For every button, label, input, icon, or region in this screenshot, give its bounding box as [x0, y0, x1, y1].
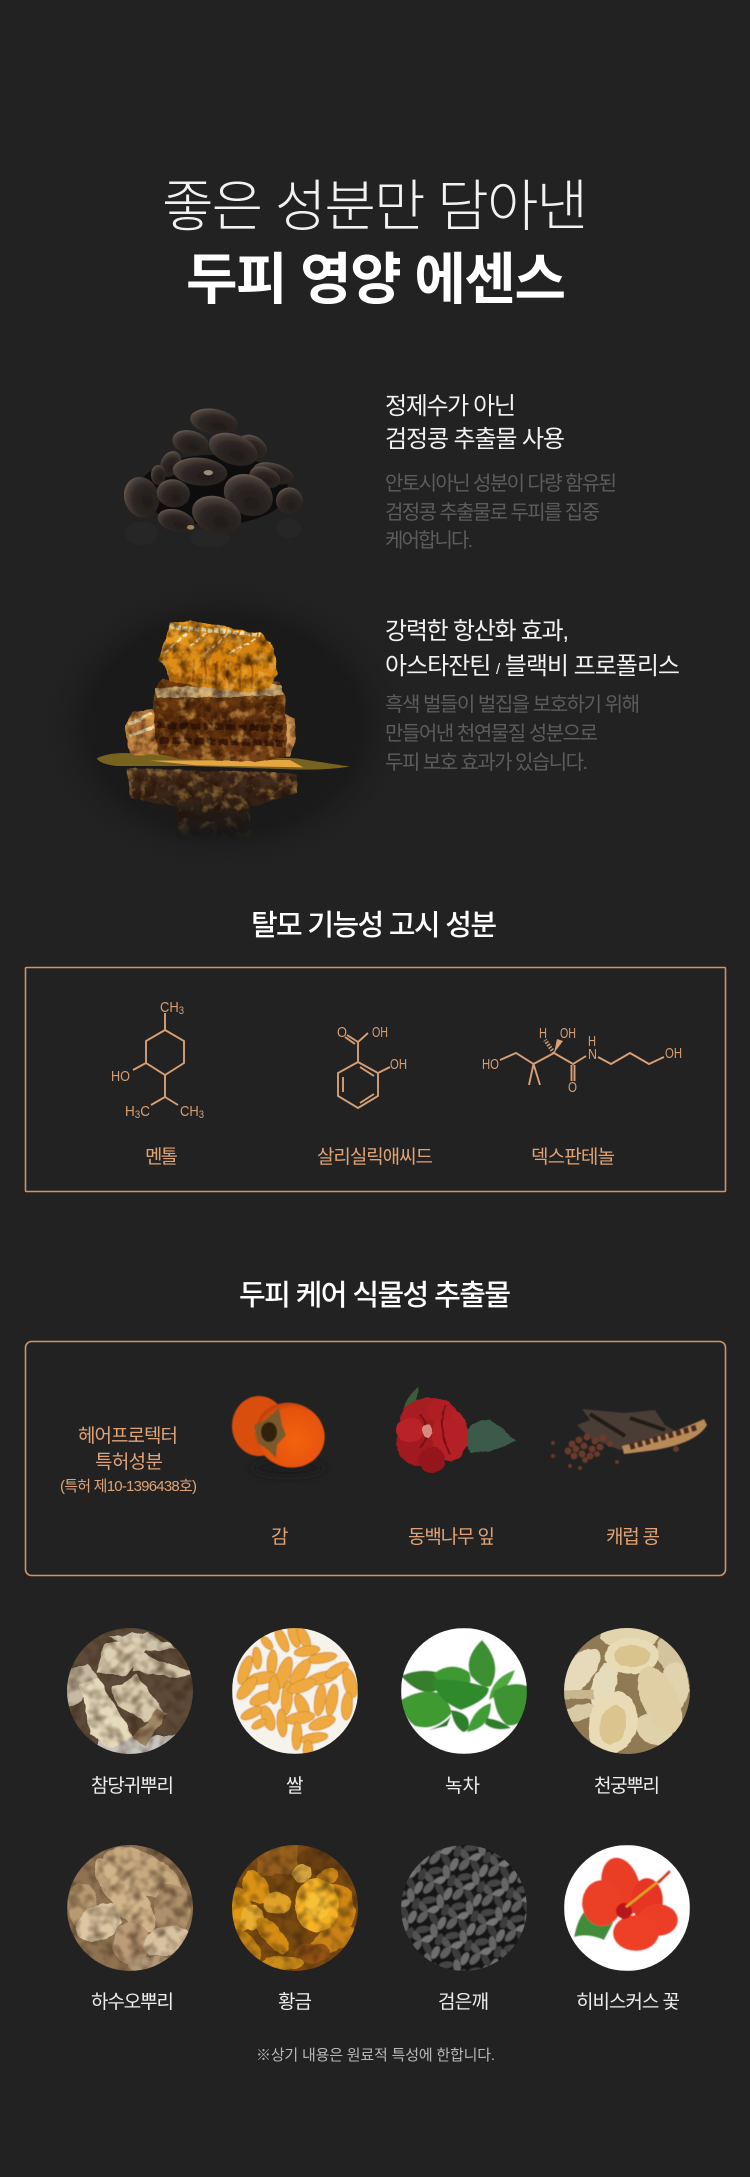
label: salicylic acid: 살리실릭애씨드 [317, 1146, 433, 1168]
molecule: menthol [111, 999, 204, 1168]
text block: black bean [385, 393, 617, 552]
text: patent: 헤어프로텍터 [78, 1425, 178, 1447]
ingredient: angelica root: 참당귀뿌리 [91, 1775, 174, 1797]
molecule: dexpanthenol: OH [665, 1045, 682, 1062]
ingredient: cnidium root: 천궁뿌리 [594, 1775, 660, 1797]
image: carob [551, 1409, 707, 1470]
labels: extracts: 감 [271, 1526, 288, 1548]
labels: extracts [271, 1526, 660, 1548]
molecule: menthol: H [125, 1103, 136, 1120]
molecule: menthol: HO [111, 1068, 130, 1085]
text: patent: (특허 제10-1396438호) [60, 1478, 197, 1495]
text block: black bean: 검정콩 추출물로 두피를 집중 [385, 501, 600, 524]
honeycomb combs [125, 621, 297, 762]
text block: honeycomb: 흑색 벌들이 벌집을 보호하기 위해 [385, 693, 640, 716]
ingredient: cnidium root [564, 1628, 690, 1794]
honey puddle [97, 753, 350, 770]
image: persimmon [232, 1393, 334, 1477]
molecule: salicylic acid: O [337, 1024, 347, 1041]
heading: plant extracts: 두피 케어 식물성 추출물 [239, 1279, 511, 1312]
text block: black bean: 안토시아닌 성분이 다량 함유된 [385, 472, 617, 495]
heading: functional ingredients: 탈모 기능성 고시 성분 [251, 909, 497, 942]
text block: honeycomb: 아스타잔틴 / 블랙비 프로폴리스 [385, 653, 680, 680]
ingredient: scutellaria root [232, 1845, 358, 2010]
ingredient: angelica root [67, 1628, 193, 1794]
molecule: menthol: 3 [135, 1109, 140, 1121]
text block: honeycomb: 두피 보호 효과가 있습니다. [385, 751, 588, 774]
image: camellia [396, 1387, 516, 1473]
ingredient: green tea [401, 1628, 528, 1797]
molecule: salicylic acid: OH [372, 1024, 388, 1041]
molecule: menthol: CH [180, 1103, 202, 1120]
ingredient: black sesame [401, 1845, 527, 2013]
molecule: menthol: CH [160, 999, 182, 1016]
text block: black bean: 케어합니다. [385, 529, 473, 552]
text block: black bean: 검정콩 추출물 사용 [385, 426, 565, 453]
molecule: dexpanthenol: H [588, 1033, 596, 1050]
molecule: dexpanthenol: N [588, 1046, 597, 1063]
ingredient: fleeceflower root [67, 1845, 193, 2010]
ingredient: hibiscus: 히비스커스 꽃 [576, 1991, 680, 2013]
molecule: menthol: C [140, 1103, 150, 1120]
text block: black bean: 정제수가 아닌 [385, 393, 516, 420]
text: patent: 특허성분 [95, 1451, 163, 1473]
title: 두피 영양 에센스 [186, 248, 566, 311]
text: patent [60, 1425, 197, 1495]
footnote: ※상기 내용은 원료적 특성에 한합니다. [256, 2047, 495, 2064]
molecule: menthol: 3 [179, 1005, 184, 1017]
ingredient: rice: 쌀 [286, 1775, 303, 1797]
honey reflection [127, 768, 297, 840]
ingredient: hibiscus [564, 1845, 690, 2013]
image: honeycomb [35, 575, 415, 875]
labels: extracts: 캐럽 콩 [606, 1526, 660, 1548]
ingredient: scutellaria root: 황금 [278, 1991, 312, 2013]
molecule: dexpanthenol [482, 1025, 682, 1168]
molecule: salicylic acid: OH [390, 1056, 407, 1073]
label: menthol: 멘톨 [145, 1146, 178, 1168]
molecule: dexpanthenol: H [539, 1025, 547, 1042]
molecule: menthol: 3 [199, 1109, 204, 1121]
label: dexpanthenol: 덱스판테놀 [531, 1146, 615, 1168]
panel: patented extracts [26, 1342, 726, 1576]
molecule: dexpanthenol: OH [560, 1025, 576, 1042]
ingredient: black sesame: 검은깨 [438, 1991, 489, 2013]
text block: honeycomb: 강력한 항산화 효과, [385, 618, 569, 645]
ingredient: rice [232, 1623, 360, 1797]
title [162, 175, 588, 311]
molecule: salicylic acid [317, 1024, 433, 1168]
panel: molecules [26, 968, 726, 1192]
text block: honeycomb: 만들어낸 천연물질 성분으로 [385, 722, 598, 745]
ingredient: green tea: 녹차 [445, 1775, 480, 1797]
labels: extracts: 동백나무 잎 [408, 1526, 495, 1548]
molecule: dexpanthenol: HO [482, 1056, 499, 1073]
ingredient: fleeceflower root: 하수오뿌리 [91, 1991, 174, 2013]
title: 좋은 성분만 담아낸 [162, 175, 588, 238]
text block: honeycomb [385, 618, 680, 774]
image: black beans [118, 405, 306, 548]
molecule: dexpanthenol: O [568, 1079, 577, 1096]
